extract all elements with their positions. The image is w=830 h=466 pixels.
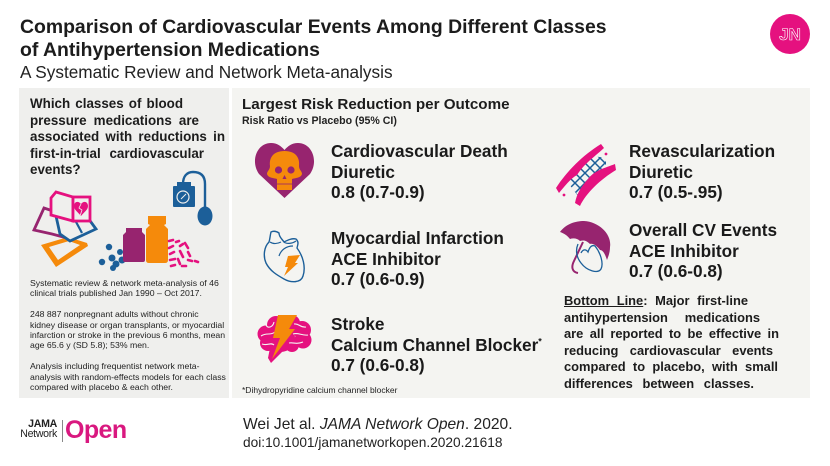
outcome: revascularization: Diuretic xyxy=(629,162,693,182)
question heading: first-in-trial cardiovascular xyxy=(30,146,204,161)
bottom line xyxy=(564,293,779,391)
footnote: *Dihydropyridine calcium channel blocker xyxy=(242,385,397,395)
outcome: overall CV events xyxy=(629,220,777,281)
bottom line: reducing cardiovascular events xyxy=(564,343,773,358)
methods text: kidney disease or organ transplants, or myocardial xyxy=(30,320,224,330)
outcome: overall CV events: 0.7 (0.6-0.8) xyxy=(629,261,723,281)
title: Comparison of Cardiovascular Events Among Different Classes xyxy=(20,16,607,38)
subtitle: A Systematic Review and Network Meta-analysis xyxy=(20,62,393,82)
bottom line: differences between classes. xyxy=(564,376,754,391)
doi: doi:10.1001/jamanetworkopen.2020.21618 xyxy=(243,435,503,450)
outcome: stroke xyxy=(331,314,542,375)
icon: JN logo: JN xyxy=(779,25,801,44)
panel: largest risk reduction xyxy=(232,88,810,398)
bottom line: compared to placebo, with small xyxy=(564,359,778,374)
citation: Wei Jet al. JAMA Network Open. 2020. xyxy=(243,416,513,433)
outcome: cardiovascular death: Cardiovascular Death xyxy=(331,141,508,161)
methods text: clinical trials published Jan 1990 – Oct 2017. xyxy=(30,288,202,298)
icon: orange bottle xyxy=(146,216,168,263)
icon: purple bottle xyxy=(123,228,145,262)
outcomes heading: Largest Risk Reduction per Outcome xyxy=(242,96,510,113)
bottom line: are all reported to be effective in xyxy=(564,326,779,341)
outcome: revascularization: Revascularization xyxy=(629,141,775,161)
title xyxy=(20,16,607,61)
outcome: cardiovascular death xyxy=(331,141,508,202)
methods text: 248 887 nonpregnant adults without chronic xyxy=(30,309,199,319)
panel: question and methods xyxy=(19,88,229,398)
question heading xyxy=(30,96,225,177)
methods text xyxy=(30,278,226,392)
outcome: myocardial infarction: 0.7 (0.6-0.9) xyxy=(331,269,425,289)
outcome: overall CV events: ACE Inhibitor xyxy=(629,241,739,261)
outcome: stroke: Calcium Channel Blocker* xyxy=(331,335,542,355)
title: of Antihypertension Medications xyxy=(20,39,320,61)
bottom line: antihypertension medications xyxy=(564,310,760,325)
icon: pink book with broken heart xyxy=(51,192,90,221)
outcome: revascularization: 0.7 (0.5-.95) xyxy=(629,182,723,202)
outcome: stroke: Stroke xyxy=(331,314,384,334)
outcome: myocardial infarction: ACE Inhibitor xyxy=(331,249,441,269)
logo: JAMA Network Open xyxy=(20,416,126,444)
icon: blue book xyxy=(56,216,96,241)
icon: scattered blue pills xyxy=(99,244,126,271)
icon: orange book xyxy=(41,237,88,267)
outcome: stroke: 0.7 (0.6-0.8) xyxy=(331,355,425,375)
methods text: Analysis including frequentist network meta- xyxy=(30,361,200,371)
methods text: infarction or stroke in the previous 6 months, mean xyxy=(30,330,225,340)
methods text: age 65.6 y (SD 5.8); 53% men. xyxy=(30,340,149,350)
logo wordmark JAMA Network: Network xyxy=(20,428,57,440)
icon: anatomical heart with bolt xyxy=(264,230,305,282)
methods text: compared with placebo & each other. xyxy=(30,382,173,392)
question heading: pressure medications are xyxy=(30,113,199,128)
logo wordmark JAMA Network xyxy=(20,418,58,440)
outcome: overall CV events: Overall CV Events xyxy=(629,220,777,240)
icon: heart with skull xyxy=(254,143,314,198)
question heading: events? xyxy=(30,162,81,177)
bottom line: Bottom Line: Major first-line xyxy=(564,293,748,308)
icon: revascularization vessel xyxy=(556,144,616,206)
icon: blood pressure cuff xyxy=(173,172,212,226)
methods text: Systematic review & network meta-analysis of 46 xyxy=(30,278,219,288)
outcome: myocardial infarction xyxy=(331,228,504,289)
outcome: revascularization xyxy=(629,141,775,202)
icon: umbrella with heart xyxy=(560,221,610,274)
illustration: medications xyxy=(32,170,212,271)
outcome: cardiovascular death: Diuretic xyxy=(331,162,395,182)
logo wordmark Open: Open xyxy=(65,416,126,444)
icon: purple book xyxy=(34,208,67,238)
icon: brain with bolt xyxy=(258,315,312,363)
methods text: analysis with random-effects models for each class xyxy=(30,372,226,382)
outcome: cardiovascular death: 0.8 (0.7-0.9) xyxy=(331,182,425,202)
outcomes subheading: Risk Ratio vs Placebo (95% CI) xyxy=(242,115,397,127)
question heading: associated with reductions in xyxy=(30,129,225,144)
icon: scattered pink pills xyxy=(169,240,198,266)
logo wordmark JAMA Network: JAMA xyxy=(28,418,57,430)
question heading: Which classes of blood xyxy=(30,96,183,111)
icon: JN logo xyxy=(770,14,810,54)
outcome: myocardial infarction: Myocardial Infarction xyxy=(331,228,504,248)
